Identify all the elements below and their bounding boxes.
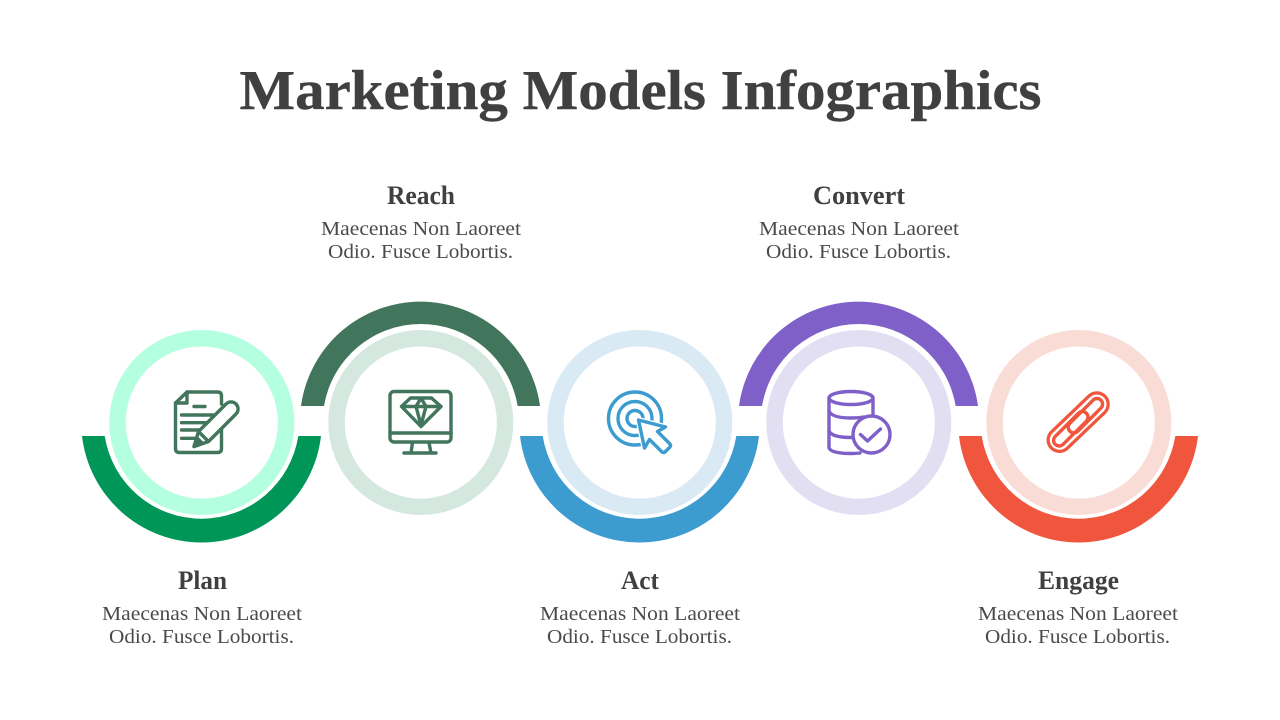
label: Engage: Maecenas Non Laoreet (978, 603, 1178, 625)
icon: monitor with diamond (390, 392, 451, 453)
label: Reach (321, 181, 521, 263)
label: Plan (102, 566, 302, 648)
step: Plan (82, 338, 321, 648)
step: Reach (301, 181, 540, 507)
step: Engage (959, 338, 1198, 648)
ring: Act (556, 338, 724, 507)
arc: Reach (301, 302, 540, 406)
label: Engage (978, 566, 1178, 648)
ring: Reach (336, 338, 505, 507)
icon: chain link (1051, 396, 1105, 448)
label: Reach: Odio. Fusce Lobortis. (328, 241, 513, 263)
label: Act: Odio. Fusce Lobortis. (547, 626, 732, 648)
label: Convert: Convert (813, 181, 905, 210)
label: Act: Maecenas Non Laoreet (540, 603, 740, 625)
label: Plan: Plan (178, 566, 228, 595)
label: Act: Act (621, 566, 659, 595)
icon: database with check (829, 392, 890, 454)
icon: document and pencil (176, 392, 238, 452)
icon: target and cursor (608, 392, 670, 452)
title: Marketing Models Infographics (240, 60, 1042, 122)
arc: Convert (739, 302, 978, 406)
arc: Act (520, 436, 759, 542)
ring: Convert (774, 338, 943, 507)
label: Convert: Maecenas Non Laoreet (759, 218, 959, 240)
label: Engage: Odio. Fusce Lobortis. (985, 626, 1170, 648)
label: Convert: Odio. Fusce Lobortis. (766, 241, 951, 263)
arc: Engage (959, 436, 1198, 542)
step: Convert (739, 181, 978, 507)
arc: Plan (82, 436, 321, 542)
label: Engage: Engage (1038, 566, 1119, 595)
label: Reach: Maecenas Non Laoreet (321, 218, 521, 240)
label: Reach: Reach (387, 181, 456, 210)
label: Convert (759, 181, 959, 263)
ring: Plan (118, 338, 286, 507)
ring: Engage (995, 338, 1163, 507)
step: Act (520, 338, 759, 648)
label: Plan: Maecenas Non Laoreet (102, 603, 302, 625)
label: Act (540, 566, 740, 648)
label: Plan: Odio. Fusce Lobortis. (109, 626, 294, 648)
